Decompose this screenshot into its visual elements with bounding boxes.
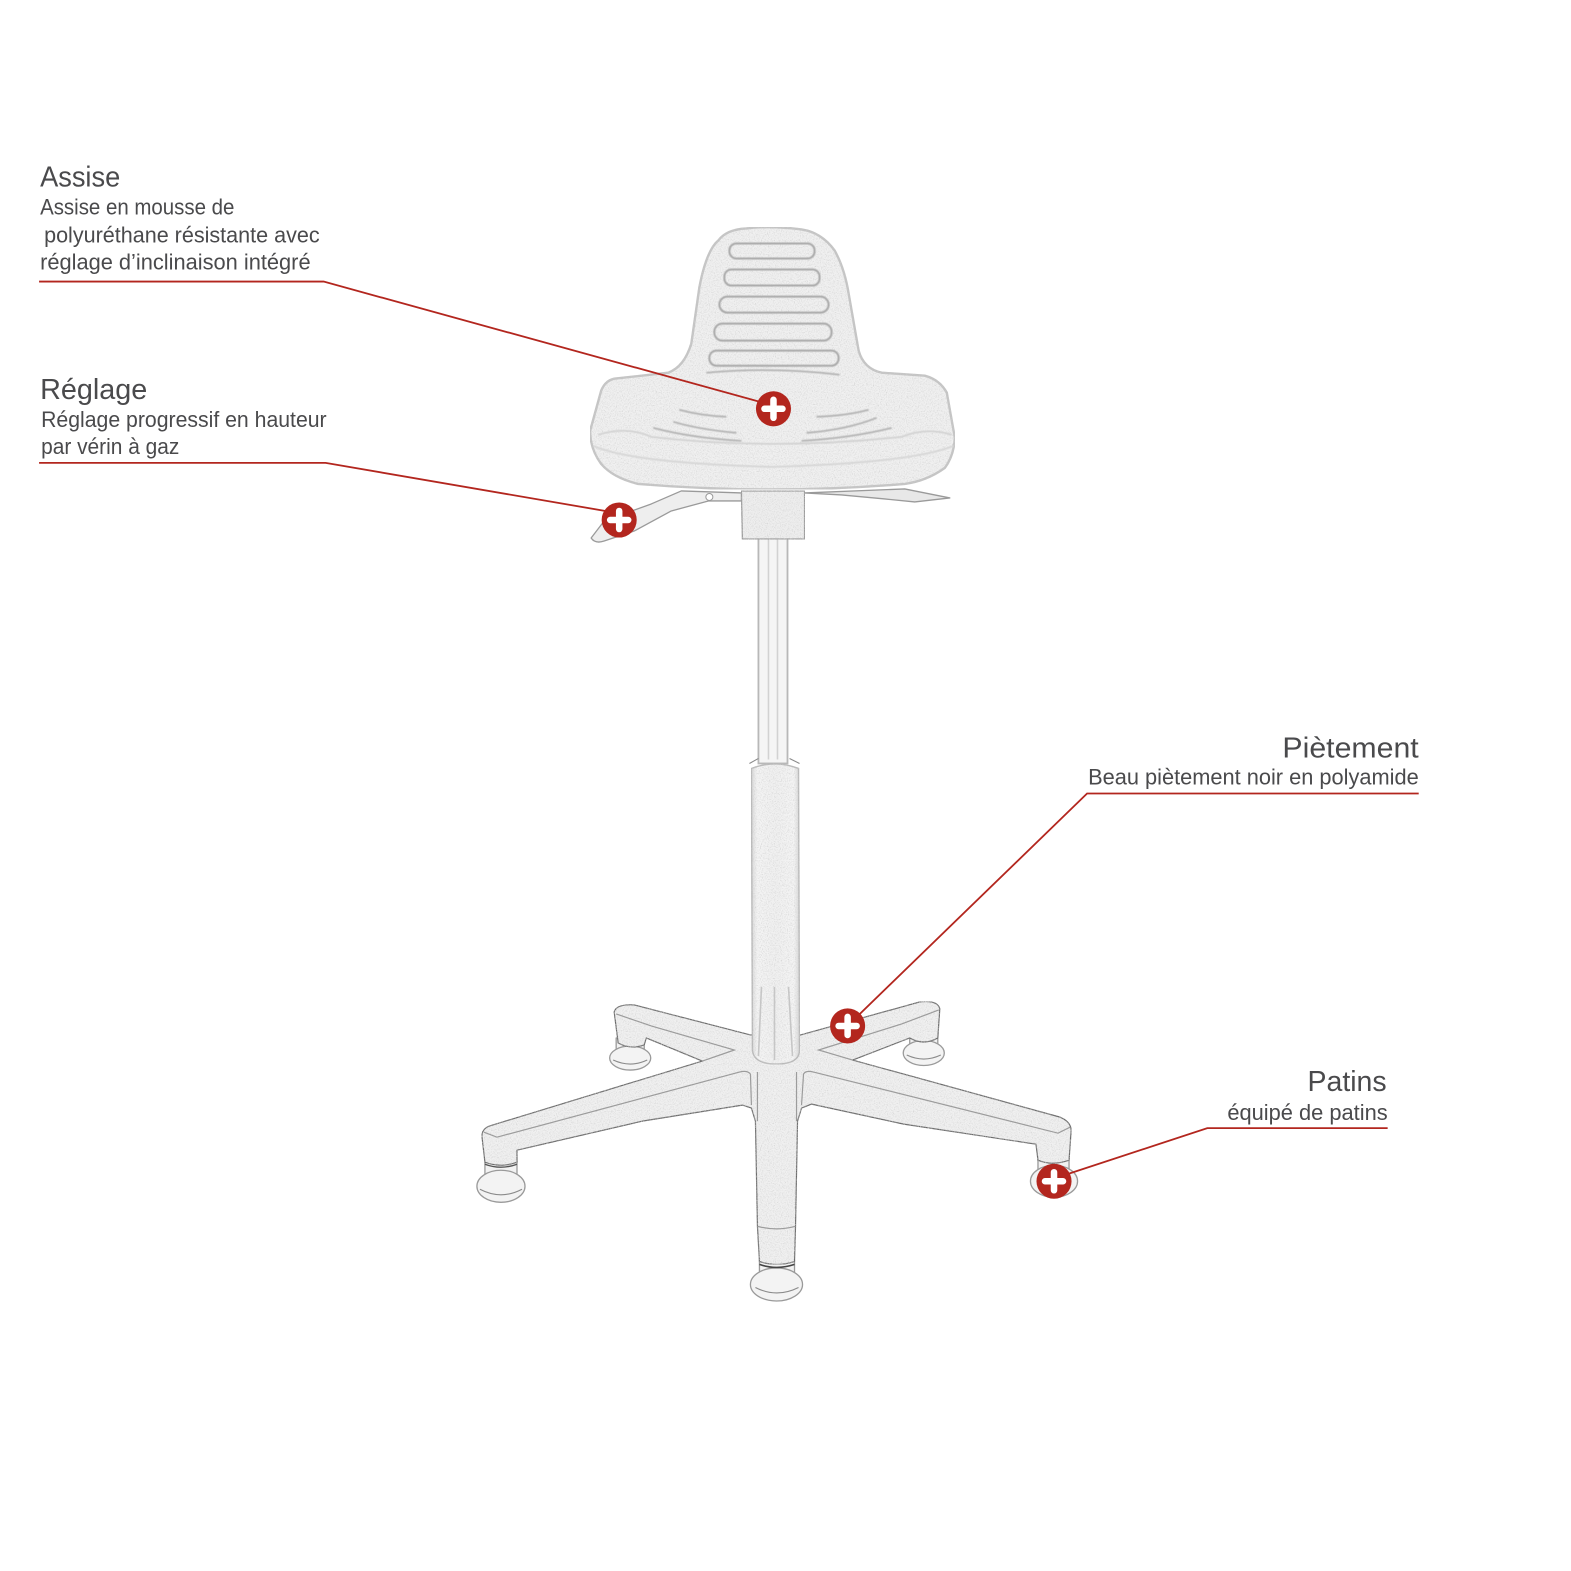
foot: front left: [477, 1160, 525, 1202]
foot: front right: [1030, 1158, 1078, 1197]
text block: Réglage description: [41, 407, 327, 459]
text block: Assise description: polyuréthane résistante avec: [44, 222, 320, 247]
callout: Réglage: [39, 374, 637, 538]
foot: rear right: [903, 1036, 944, 1066]
leader line: Patins: [1064, 1128, 1388, 1175]
text block: Patins description: équipé de patins: [1227, 1100, 1388, 1125]
heading: Piètement: Piètement: [1282, 732, 1419, 764]
base edge details: [484, 1010, 1070, 1229]
stool illustration: [477, 227, 1078, 1301]
marker: Réglage: [602, 502, 637, 538]
leader line: Réglage: [39, 463, 611, 512]
seat grooves: [593, 370, 954, 467]
marker: Patins: [1036, 1164, 1072, 1199]
text block: Réglage description: par vérin à gaz: [41, 434, 179, 459]
gas lift rod: [758, 537, 788, 763]
heading: Assise: Assise: [40, 161, 120, 193]
text block: Assise description: Assise en mousse de: [40, 194, 234, 219]
foot: front centre: [750, 1260, 803, 1301]
column sleeve: [749, 758, 800, 1064]
seat mount: [741, 491, 805, 539]
five-star base: [482, 1002, 1071, 1264]
callout: Patins: [1036, 1066, 1388, 1199]
text block: Piètement description: Beau piètement noir en polyamide: [1088, 764, 1419, 789]
callout: Assise: [39, 161, 791, 426]
marker: Assise: [756, 391, 791, 426]
seat and backrest: [590, 227, 955, 489]
text block: Assise description: réglage d’inclinaison intégré: [40, 250, 311, 275]
heading: Réglage: Réglage: [40, 374, 147, 406]
text block: Réglage description: Réglage progressif en hauteur: [41, 407, 327, 432]
backrest grooves: [709, 243, 839, 366]
leader line: Piètement: [854, 794, 1419, 1020]
text block: Assise description: [40, 194, 320, 275]
height adjustment lever: [591, 489, 950, 542]
leader line: Assise: [39, 282, 763, 403]
heading: Patins: Patins: [1307, 1066, 1387, 1098]
foot: rear left: [610, 1038, 651, 1070]
callout: Piètement: [830, 732, 1419, 1043]
marker: Piètement: [830, 1008, 865, 1043]
